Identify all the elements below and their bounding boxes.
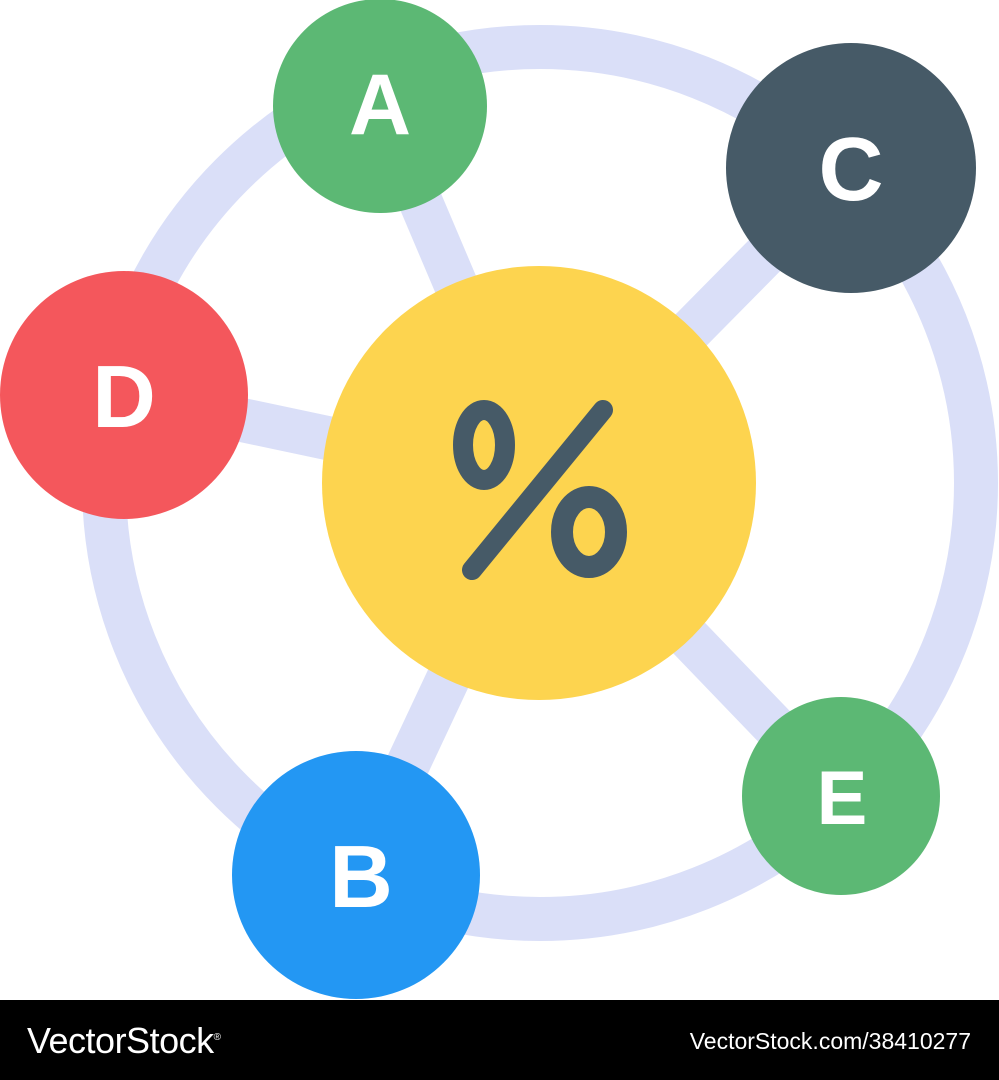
- node C: [726, 43, 976, 293]
- central circle: percent: [322, 266, 756, 700]
- node D: D: [92, 347, 156, 446]
- node A: A: [349, 57, 411, 153]
- footer url: VectorStock.com/38410277: [690, 1028, 971, 1054]
- icon: percent sign: [463, 410, 616, 570]
- footer brand: VectorStock®: [27, 1020, 220, 1061]
- outer ring: [104, 47, 976, 919]
- node D: [0, 271, 248, 519]
- connectors: [124, 106, 851, 875]
- node E: E: [817, 756, 867, 841]
- footer bar: [0, 1000, 999, 1080]
- node B: [232, 751, 480, 999]
- node E: [742, 697, 940, 895]
- node B: B: [329, 827, 393, 926]
- node A: [273, 0, 487, 213]
- node C: C: [818, 120, 884, 220]
